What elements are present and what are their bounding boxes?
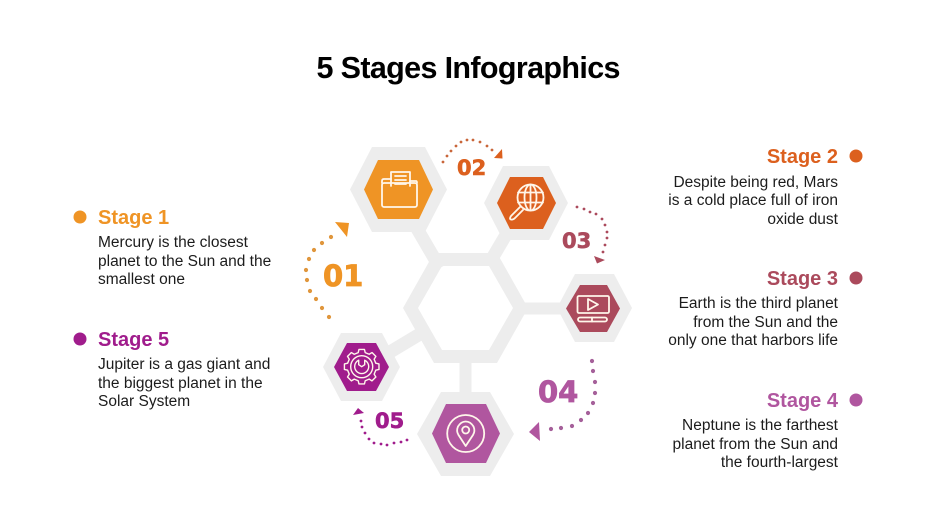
stage 3 text block: from the Sun and the xyxy=(693,314,838,331)
stage 5 text block: Jupiter is a gas giant and xyxy=(98,356,270,373)
hexagon 2 backing xyxy=(484,166,568,240)
stage 1 text block: planet to the Sun and the xyxy=(98,253,271,270)
stage 4 text block: Neptune is the farthest xyxy=(682,417,839,434)
stage 1 text block: Mercury is the closest xyxy=(98,234,249,251)
hexagon 5 backing xyxy=(323,333,400,401)
number 05: 05 xyxy=(375,409,404,433)
stage 5 text block: Stage 5 xyxy=(98,329,169,351)
arrow 03 xyxy=(576,206,608,264)
hexagon 1 backing xyxy=(350,147,447,232)
stage 2 text block: Despite being red, Mars xyxy=(673,174,838,191)
stage 3 hexagon icon: video monitor xyxy=(566,285,620,332)
number 01: 01 xyxy=(323,259,363,293)
arrow 01 xyxy=(304,222,349,319)
stage 5 hexagon icon: gear wrench xyxy=(334,343,389,391)
stage 2 hexagon icon: globe search xyxy=(497,177,556,229)
stage 4 text block xyxy=(673,390,862,471)
stage 1 hexagon icon: folder xyxy=(364,160,433,219)
stage 5 text block: Solar System xyxy=(98,393,190,410)
stage 3 text block xyxy=(668,268,862,349)
stage 1 text block xyxy=(74,207,271,288)
stage 1 text block: Stage 1 xyxy=(98,207,169,229)
central hexagon diagram xyxy=(323,147,632,476)
stage 1 text block: smallest one xyxy=(98,271,185,288)
stage 3 text block: Stage 3 xyxy=(767,268,838,290)
stage 3 text block: only one that harbors life xyxy=(668,332,838,349)
title: 5 Stages Infographics xyxy=(316,51,620,85)
stage 3 text block: Earth is the third planet xyxy=(679,295,839,312)
number 03: 03 xyxy=(562,229,591,253)
stage 2 text block: is a cold place full of iron xyxy=(668,192,838,209)
number 04: 04 xyxy=(538,375,578,409)
arrow 04 xyxy=(529,359,597,441)
connectors xyxy=(385,220,570,400)
arrow 02 xyxy=(442,139,502,163)
stage 2 text block: oxide dust xyxy=(767,211,839,228)
stage 5 text block: the biggest planet in the xyxy=(98,375,263,392)
stage 4 text block: the fourth-largest xyxy=(721,454,839,471)
stage 4 text block: planet from the Sun and xyxy=(673,436,838,453)
stage 5 text block xyxy=(74,329,270,410)
arrow 05 xyxy=(353,408,408,446)
hexagon 4 backing xyxy=(417,392,514,476)
number 02: 02 xyxy=(457,156,486,180)
stage 4 hexagon icon: map pin xyxy=(432,404,500,463)
center hexagon ring xyxy=(403,253,528,363)
stage 4 text block: Stage 4 xyxy=(767,390,839,412)
hexagon 3 backing xyxy=(557,274,632,342)
stage 2 text block xyxy=(668,146,862,228)
stage 2 text block: Stage 2 xyxy=(767,146,838,168)
